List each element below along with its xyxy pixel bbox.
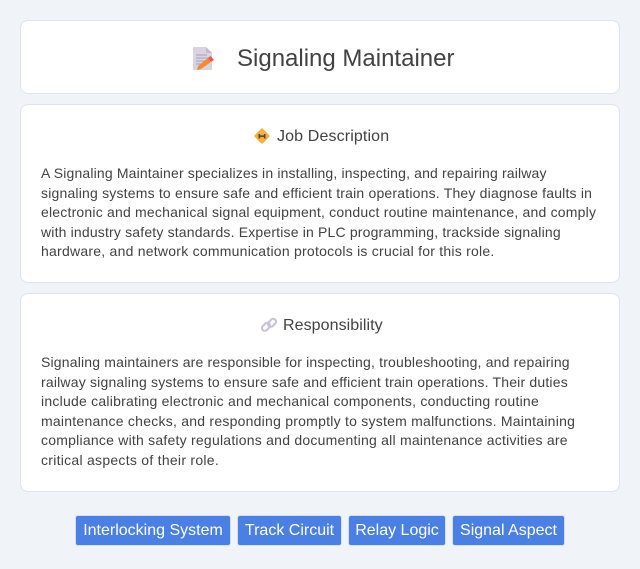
tag: interlocking system [76, 516, 230, 545]
heading: job description: Job Description [277, 128, 389, 145]
text: responsibility body [41, 354, 575, 468]
tag: track circuit [238, 516, 341, 545]
text: job description body: hardware, and network communication protocols is crucial for this role. [41, 243, 495, 259]
text: responsibility body: maintenance checks, and responding promptly to system malfunctions. Maintaining [41, 412, 575, 428]
tag: relay logic [349, 516, 445, 545]
tag: signal aspect [453, 516, 564, 545]
text: job description body [41, 165, 596, 259]
text: job description body: A Signaling Maintainer specializes in installing, inspecting, and repairing railway [41, 165, 547, 181]
text: responsibility body: compliance with safety regulations and documenting all maintenance activities are [41, 432, 568, 448]
icon: chain link [261, 318, 277, 332]
icon: document with pencil [193, 47, 214, 70]
text: responsibility body: critical aspects of their role. [41, 452, 219, 468]
panel: job description [20, 104, 620, 283]
text: responsibility body: include calibrating electronic and mechanical components, conducting routine [41, 393, 539, 409]
tag: track circuit: Track Circuit [245, 522, 334, 539]
panel: title card [20, 20, 620, 94]
text: job description body: with industry safety standards. Expertise in PLC programming, trackside signaling [41, 224, 561, 240]
text: job description body: signaling systems to ensure safe and efficient train operations. They diagnose faults in [41, 184, 592, 200]
tag: interlocking system: Interlocking System [83, 522, 223, 539]
text: responsibility body: railway signaling systems to ensure safe and efficient train operations. Their duties [41, 374, 568, 390]
text: responsibility body: Signaling maintainers are responsible for inspecting, troubleshooting, and repairing [41, 354, 570, 370]
title: Signaling Maintainer [237, 45, 454, 72]
panel: responsibility [20, 293, 620, 492]
text: job description body: electronic and mechanical signal equipment, conduct routine maintenance, and comply [41, 204, 596, 220]
heading: responsibility: Responsibility [283, 317, 383, 334]
icon: diamond road sign [254, 128, 270, 144]
tag: relay logic: Relay Logic [355, 522, 439, 539]
tag: signal aspect: Signal Aspect [460, 522, 557, 539]
